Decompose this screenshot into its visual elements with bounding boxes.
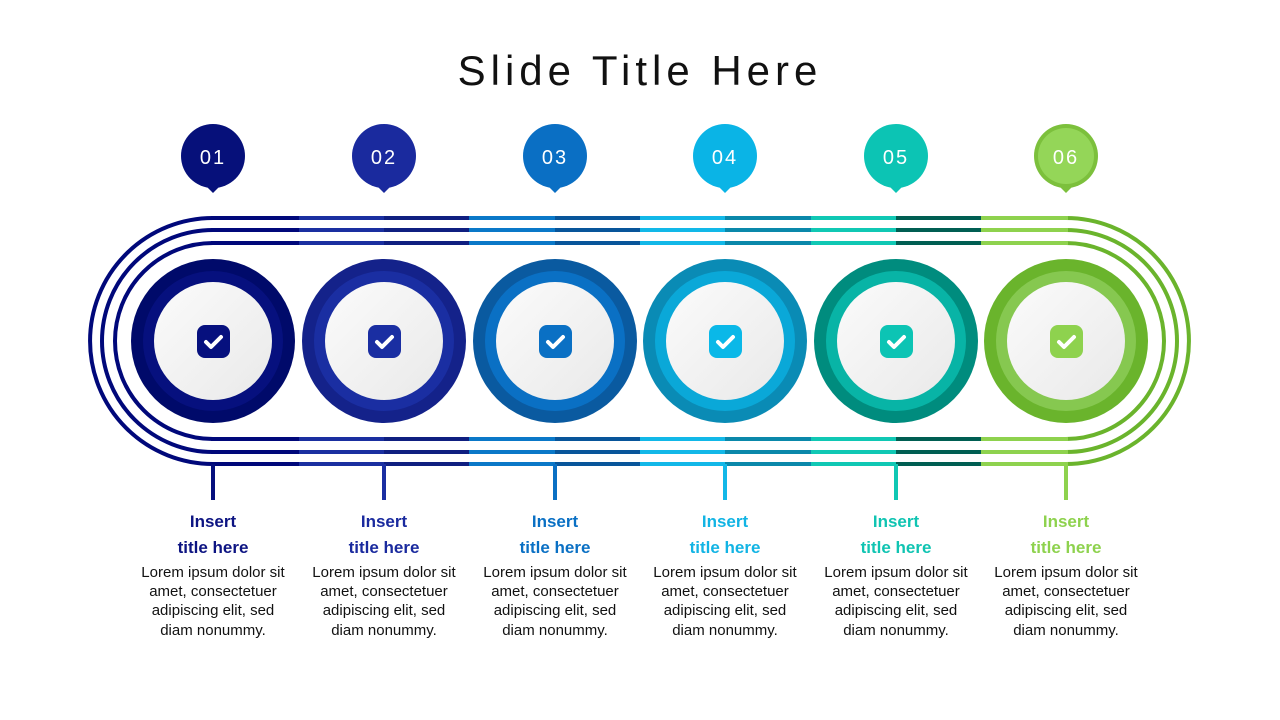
connector 4 (723, 464, 727, 500)
circle 2 (302, 259, 466, 423)
text 1: amet, consectetuer (149, 583, 277, 600)
text 5: Lorem ipsum dolor sit (824, 564, 969, 581)
step 6 (984, 124, 1148, 639)
text 6 (994, 512, 1139, 639)
text 6: Insert (1043, 512, 1089, 531)
step 4 (643, 124, 807, 639)
pin 04: 04 (712, 147, 738, 169)
connector 5 (894, 464, 898, 500)
connector 3 (553, 464, 557, 500)
step 3 (473, 124, 637, 639)
pin 03: 03 (542, 147, 568, 169)
circle 3 (473, 259, 637, 423)
text 2: title here (349, 538, 419, 557)
pin 05: 05 (883, 147, 909, 169)
circle 1 (131, 259, 295, 423)
text 4 (653, 512, 798, 639)
pin 02: 02 (371, 147, 397, 169)
pin 06 (1034, 124, 1098, 193)
text 6: amet, consectetuer (1002, 583, 1130, 600)
text 2: adipiscing elit, sed (323, 602, 445, 619)
text 4: title here (690, 538, 760, 557)
connector 2 (382, 464, 386, 500)
text 5: diam nonummy. (843, 622, 949, 639)
text 1: Lorem ipsum dolor sit (141, 564, 286, 581)
pin 06: 06 (1053, 147, 1079, 169)
text 6: adipiscing elit, sed (1005, 602, 1127, 619)
pin 02 (352, 124, 416, 193)
text 2 (312, 512, 457, 639)
text 4: diam nonummy. (672, 622, 778, 639)
step 5 (814, 124, 978, 639)
connector 6 (1064, 464, 1068, 500)
pin 04 (693, 124, 757, 193)
circle 5 (814, 259, 978, 423)
text 3: Lorem ipsum dolor sit (483, 564, 628, 581)
text 3: Insert (532, 512, 578, 531)
text 5: amet, consectetuer (832, 583, 960, 600)
text 4: amet, consectetuer (661, 583, 789, 600)
text 6: diam nonummy. (1013, 622, 1119, 639)
circle 4 (643, 259, 807, 423)
text 5 (824, 512, 969, 639)
pin 01: 01 (200, 147, 226, 169)
text 1: diam nonummy. (160, 622, 266, 639)
text 2: amet, consectetuer (320, 583, 448, 600)
title: Slide Title Here (458, 47, 822, 94)
step 2 (302, 124, 466, 639)
text 3: title here (520, 538, 590, 557)
text 1: Insert (190, 512, 236, 531)
text 2: Lorem ipsum dolor sit (312, 564, 457, 581)
text 1: title here (178, 538, 248, 557)
text 3: adipiscing elit, sed (494, 602, 616, 619)
pin 05 (864, 124, 928, 193)
pin 01 (181, 124, 245, 193)
text 3: amet, consectetuer (491, 583, 619, 600)
text 2: diam nonummy. (331, 622, 437, 639)
text 1 (141, 512, 286, 639)
pin 03 (523, 124, 587, 193)
text 5: Insert (873, 512, 919, 531)
connector 1 (211, 464, 215, 500)
text 5: adipiscing elit, sed (835, 602, 957, 619)
text 5: title here (861, 538, 931, 557)
step 1 (131, 124, 295, 639)
text 6: Lorem ipsum dolor sit (994, 564, 1139, 581)
text 3: diam nonummy. (502, 622, 608, 639)
text 4: adipiscing elit, sed (664, 602, 786, 619)
text 4: Insert (702, 512, 748, 531)
circle 6 (984, 259, 1148, 423)
text 4: Lorem ipsum dolor sit (653, 564, 798, 581)
text 2: Insert (361, 512, 407, 531)
text 1: adipiscing elit, sed (152, 602, 274, 619)
text 6: title here (1031, 538, 1101, 557)
text 3 (483, 512, 628, 639)
track: rounded line loop (90, 218, 1189, 464)
